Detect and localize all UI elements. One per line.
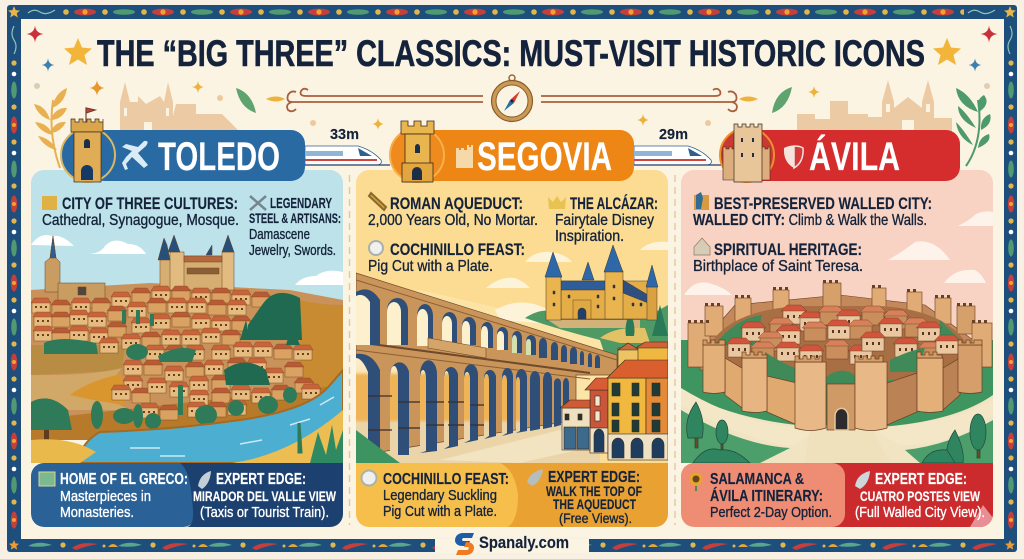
panel: Avila (681, 170, 993, 527)
aqueduct lower openings (356, 358, 520, 455)
Avila box: expert edge: (Full Walled City View). (855, 504, 985, 521)
train: Toledo to Segovia (305, 126, 390, 165)
Segovia ground (384, 422, 600, 463)
header: Segovia (390, 121, 634, 182)
aqueduct tier bands (368, 396, 484, 430)
footer logo (435, 533, 589, 559)
Segovia box: cochinillo feast (356, 463, 518, 527)
Toledo text: city of three cultures (42, 194, 239, 229)
Avila box: expert edge (830, 463, 993, 527)
Avila clouds (684, 211, 993, 295)
Toledo green trees (31, 293, 302, 450)
Toledo box: home of El Greco: Masterpieces in (60, 488, 151, 505)
Toledo box: expert edge: (Taxis or Tourist Train). (200, 504, 329, 521)
aqueduct (356, 273, 617, 456)
train: Segovia to Avila: 29m (659, 126, 688, 143)
icon: shield (784, 146, 803, 168)
Segovia town buildings (560, 342, 668, 460)
Segovia text: Roman aqueduct: ROMAN AQUEDUCT: (390, 194, 523, 213)
scroll ornament: left (266, 89, 483, 111)
silhouette: left historic skyline (120, 82, 240, 132)
Avila text: spiritual heritage: Birthplace of Saint Teresa. (693, 258, 863, 275)
Toledo clouds (31, 235, 343, 285)
Segovia box: cochinillo feast: COCHINILLO FEAST: (383, 471, 509, 488)
Toledo text: legendary steel: LEGENDARY (270, 195, 332, 212)
Toledo town houses (31, 286, 321, 420)
icon: Toledo tower (61, 108, 115, 182)
Segovia box: cochinillo feast: Legendary Suckling (383, 487, 497, 504)
Toledo hill and ground (31, 283, 343, 420)
aqueduct stone body (356, 273, 617, 456)
Segovia box: expert edge: (Free Views). (559, 510, 632, 526)
Segovia bush (356, 430, 400, 463)
Avila sky (681, 170, 993, 340)
panel: Toledo (31, 170, 343, 527)
Toledo box: expert edge: EXPERT EDGE: (216, 471, 306, 488)
Toledo text: city of three cultures: CITY OF THREE CULTURES: (62, 194, 238, 213)
Toledo Alcazar (158, 235, 234, 290)
Toledo river (75, 370, 343, 463)
header: Toledo (61, 108, 305, 182)
header: Segovia: SEGOVIA (477, 135, 612, 179)
icon: small castle (456, 145, 473, 168)
icon: Avila tower (720, 124, 774, 182)
train: Segovia to Avila (634, 126, 722, 165)
Avila text: spiritual heritage: SPIRITUAL HERITAGE: (714, 240, 862, 259)
Segovia text: Roman aqueduct (368, 193, 538, 229)
Segovia text: Roman aqueduct: 2,000 Years Old, No Mortar. (368, 212, 538, 229)
Avila text: best-preserved walled city (693, 192, 932, 229)
Segovia text: cochinillo feast: COCHINILLO FEAST: (390, 240, 525, 259)
Avila box: expert edge: CUATRO POSTES VIEW (860, 489, 980, 504)
dashed dividers between panels (350, 175, 675, 525)
Avila trees (687, 402, 986, 463)
Avila text: best-preserved walled city: WALLED CITY: Climb & Walk the Walls. (693, 212, 927, 229)
Segovia text: the Alcazar: Inspiration. (555, 228, 624, 245)
aqueduct upper openings light (356, 295, 531, 355)
Avila front walls and towers (703, 340, 982, 430)
train: Toledo to Segovia: 33m (330, 126, 359, 143)
Segovia box: expert edge: THE AQUEDUCT (553, 497, 637, 512)
footer logo: Spanaly.com (479, 534, 569, 552)
icon: plane (122, 141, 148, 170)
Toledo box: home of El Greco: Monasteries. (60, 504, 134, 521)
Toledo sky (31, 170, 343, 300)
Avila town interior (710, 305, 970, 385)
Avila text: spiritual heritage (693, 238, 863, 275)
Segovia text: the Alcazar (548, 194, 658, 245)
Toledo text: city of three cultures: Cathedral, Synagogue, Mosque. (42, 212, 239, 229)
Avila back walls and towers (688, 280, 992, 370)
decorative sparkles and leaves (26, 26, 998, 130)
Avila box: Salamanca itinerary: ÁVILA ITINERARY: (710, 486, 823, 505)
Avila box: Salamanca itinerary (681, 463, 845, 527)
Toledo cathedral (45, 236, 105, 308)
Segovia text: the Alcazar: THE ALCÁZAR: (570, 194, 658, 213)
Avila text: best-preserved walled city: BEST-PRESERVED WALLED CITY: (714, 194, 932, 213)
Toledo box: expert edge (180, 463, 343, 527)
Segovia box: expert edge: EXPERT EDGE: (548, 469, 640, 486)
Avila box: Salamanca itinerary: SALAMANCA & (710, 471, 804, 488)
icon: compass (492, 75, 532, 122)
Toledo text: legendary steel: Damascene (249, 226, 310, 243)
Toledo text: legendary steel: STEEL & ARTISANS: (249, 210, 341, 226)
laurel: left gold branch (34, 88, 67, 168)
aqueduct lower arches (356, 354, 569, 455)
icon: Segovia tower (390, 121, 444, 182)
Segovia box: cochinillo feast: Pig Cut with a Plate. (383, 503, 497, 520)
Avila box: Salamanca itinerary: Perfect 2-Day Option. (710, 504, 832, 521)
Segovia box: expert edge (500, 463, 668, 527)
Segovia text: the Alcazar: Fairytale Disney (555, 212, 654, 229)
Toledo box: expert edge: MIRADOR DEL VALLE VIEW (193, 489, 336, 504)
Segovia clouds (486, 242, 668, 325)
panel: Segovia (356, 170, 668, 527)
Avila ground (681, 395, 993, 463)
silhouette: right historic skyline (797, 80, 952, 132)
Toledo river banks (31, 439, 96, 463)
Segovia text: cochinillo feast (368, 240, 525, 275)
laurel: right green branch (956, 88, 991, 166)
Segovia box: expert edge: WALK THE TOP OF (546, 484, 642, 499)
Toledo text: legendary steel (249, 195, 341, 259)
aqueduct upper arches (356, 289, 600, 368)
Avila box: expert edge: EXPERT EDGE: (875, 471, 967, 488)
Segovia sky (356, 170, 668, 470)
header: Avila: ÁVILA (809, 134, 900, 179)
Segovia Alcazar castle (545, 245, 658, 320)
header: Toledo: TOLEDO (158, 135, 280, 179)
Segovia text: cochinillo feast: Pig Cut with a Plate. (368, 258, 493, 275)
Toledo box: home of El Greco (31, 463, 196, 527)
Toledo text: legendary steel: Jewelry, Swords. (249, 242, 336, 259)
scroll ornament: right (541, 89, 758, 111)
Segovia hill (525, 305, 668, 370)
Toledo box: home of El Greco: HOME OF EL GRECO: (60, 471, 188, 488)
header: Avila (720, 124, 960, 182)
